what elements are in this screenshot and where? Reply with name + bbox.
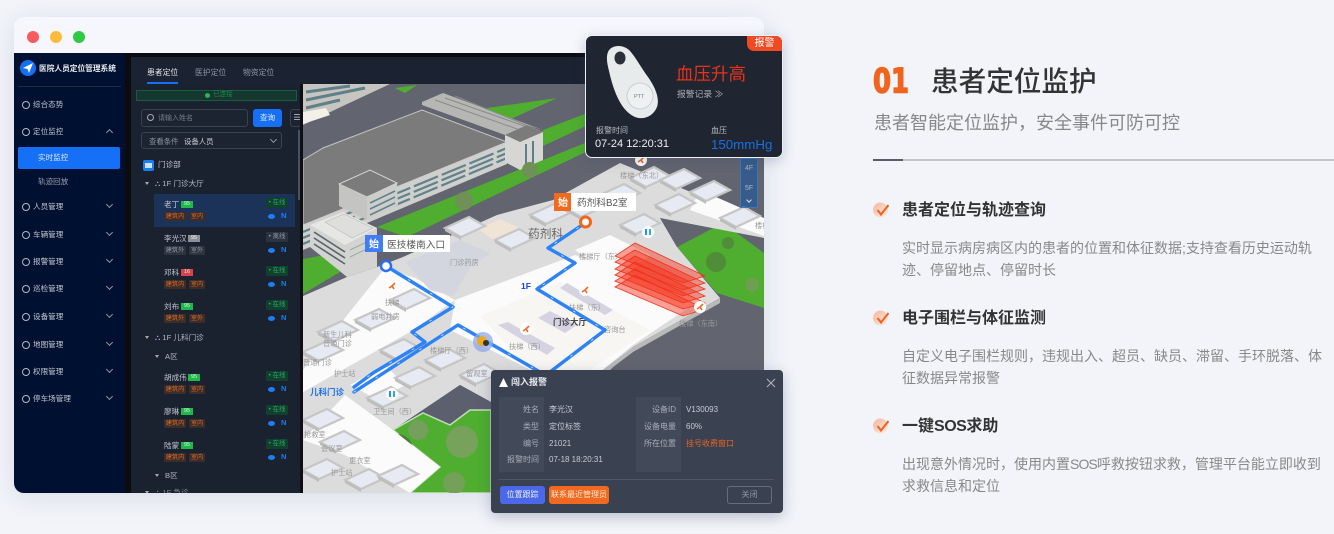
search button: 查询 [260,113,275,122]
menu item: 地图管理 [33,340,63,349]
map labels: 扶梯（西） [509,342,545,351]
menu item: 人员管理 [33,202,63,211]
blood pressure label: 血压 [711,126,727,135]
menu item [22,394,113,403]
map labels: 新生儿科 [323,330,352,339]
patient row: • 在线 [269,372,285,379]
start marker: south entrance [365,235,450,271]
button: track [500,486,545,504]
alert heading: 血压升高 [676,64,746,84]
label: outpatient hall: 门诊大厅 [553,317,588,327]
patient row: 建筑外 [166,315,184,322]
number label: 编号 [523,439,539,448]
icon: check [873,202,889,218]
submenu item: 轨迹回放 [38,177,68,186]
menu item [22,367,113,376]
patient row: 95 [191,235,197,241]
restroom pins [386,226,654,400]
white corridors and hall [303,190,764,493]
map labels: 留观室 [466,369,488,378]
feature heading: 电子围栏与体征监测 [902,310,1046,327]
start marker: pharmacy room: 药剂科B2室 [577,196,628,209]
map labels: 楼梯厅（东） [579,252,622,261]
left label column [499,397,544,472]
patient row: N [281,279,286,288]
patient row: 刘布 [164,302,179,311]
patient row: • 在线 [269,406,285,413]
patient row: 室内 [191,454,203,461]
tree node: ⛬ 1F 门诊大厅 [155,179,204,188]
icon: logo [20,60,36,76]
feature heading: 患者定位与轨迹查询 [902,202,1046,219]
lower lawn [393,410,491,493]
window card [14,17,764,493]
button: close: 关闭 [742,490,758,499]
battery value: 60% [686,422,702,431]
patient row: N [281,211,286,220]
patient row: 95 [184,442,190,448]
floor selector: 5F [745,185,753,192]
alert tag: 报警 [754,38,774,49]
green lawns [303,85,764,308]
section title: 患者定位监护 [931,66,1097,97]
tree node: B区 [165,471,178,480]
title bar dots [27,31,85,43]
map [303,84,764,493]
person marker [473,332,493,352]
search box [141,109,248,127]
patient row: 室外 [191,247,203,254]
time label: 报警时间 [507,455,539,464]
patient row: 室内 [191,386,203,393]
tabs bar [131,57,764,84]
patient row: 老丁 [164,200,179,209]
search box: 请输入姓名 [158,115,193,122]
feature text: 求救信息和定位 [902,478,1000,494]
label: 1F: 1F [521,281,531,291]
close icon [766,378,776,388]
map labels: 护士站 [331,468,353,477]
patient row: 建筑外 [166,247,184,254]
menu item: 综合态势 [33,100,63,109]
patient row: 陆蒙 [164,441,179,450]
patient row: 李光汉 [164,234,187,243]
menu item [22,230,113,239]
patient row [164,232,288,255]
patient row: 95 [191,374,197,380]
feature text [902,456,1321,494]
floor selector [740,158,758,208]
label: pediatric clinic: 儿科门诊 [310,387,345,397]
right road [660,218,700,247]
active menu item [18,147,120,169]
feature text: 实时显示病房病区内的患者的位置和体征数据;支持查看历史运动轨 [902,240,1312,256]
map labels: 扶梯（东） [569,303,605,312]
route line [354,223,605,392]
menu item [22,284,113,293]
patient row: 建筑内 [166,281,184,288]
patient row: N [281,384,286,393]
condition select: 设备人员 [184,137,214,146]
tab: 医护定位 [195,68,226,77]
blood pressure value: 150mmHg [711,137,772,152]
patient row: 廖琳 [164,407,179,416]
patient row: • 在线 [269,440,285,447]
top-left building [303,84,390,125]
connection status: 已连接 [213,91,233,98]
patient row: N [281,313,286,322]
active tab: 患者定位 [147,68,178,77]
menu item [22,127,113,136]
icon: teardrop tag device [606,46,658,118]
patient row: 95 [184,303,190,309]
selected row highlight [154,194,295,227]
patient row: 室内 [191,420,203,427]
menu item [22,257,113,266]
patient row: 邓科 [164,268,179,277]
menu item [22,340,113,349]
label: pharmacy: 药剂科 [528,227,563,241]
name value: 李光汉 [549,405,573,414]
patient row [164,405,288,428]
patient row: 16 [184,269,190,275]
patient row: • 在线 [269,267,285,274]
patient row [164,198,288,221]
escalators [498,283,613,355]
alert tag [747,36,782,51]
patient row: 建筑内 [166,420,184,427]
icon: warning [499,378,508,387]
feature text: 征数据异常报警 [902,370,1000,386]
feature text: 自定义电子围栏规则，违规出入、超员、缺员、滞留、手环脱落、体 [902,348,1322,364]
map labels: 楼梯厅（西） [430,346,473,355]
dialog title: 闯入报警 [511,377,547,387]
feature text [902,240,1312,278]
patient row: 胡成伟 [164,373,187,382]
menu item: 车辆管理 [33,230,63,239]
feature heading: 一键SOS求助 [902,418,998,435]
map labels: 会议室 [321,444,343,453]
red geofence stack [615,243,705,316]
left white building [310,212,377,277]
button: contact admin: 联系最近管理员 [551,490,607,499]
escalator pins [386,154,706,335]
patient row: 95 [184,408,190,414]
device id label: 设备ID [652,405,676,414]
map labels: 咨询台 [604,325,626,334]
patient row: 建筑内 [166,213,184,220]
hall floor [480,282,650,370]
icon: check [873,310,889,326]
start marker: south entrance: 始 [369,238,379,250]
tab: 物资定位 [243,68,274,77]
search button [253,109,282,127]
icon: check [873,418,889,434]
ground asphalt [303,84,764,493]
patient row: 室内 [191,281,203,288]
map labels: 楼梯（东北） [620,171,663,180]
start marker: pharmacy room: 始 [558,196,568,209]
start marker: south entrance: 医技楼南入口 [387,238,445,251]
location value: 挂号收费窗口 [686,439,734,448]
patient row: 95 [184,201,190,207]
intrusion alert dialog [491,370,783,513]
menu item: 设备管理 [33,312,63,321]
right label column [636,397,681,472]
device id value: V130093 [686,405,718,414]
button: contact admin [549,486,609,504]
button: close [727,486,772,504]
number value: 21021 [549,439,571,448]
rooms [303,167,760,492]
alert time value: 07-24 12:20:31 [595,138,669,150]
patient row: • 在线 [269,301,285,308]
condition select [141,132,282,149]
floor outer wall [600,298,720,377]
trees [381,162,759,494]
map labels: 卫生间（西） [373,407,416,416]
map labels [303,171,769,477]
blood pressure alert card [585,35,783,158]
icon: teardrop tag device: PTT [634,94,645,100]
system name: 医院人员定位管理系统 [39,64,116,73]
filter toggle [290,109,304,127]
map labels: 扶梯 [385,298,399,307]
menu item: 定位监控 [33,127,63,136]
tan pharmacy room [478,219,530,248]
pharmacy block [405,240,490,296]
patient row: 室外 [191,315,203,322]
patient row: N [281,245,286,254]
menu item: 巡检管理 [33,284,63,293]
grey asphalt patch [393,385,491,430]
patient row: • 离线 [269,233,285,240]
map labels: 门诊药房 [450,258,479,267]
floor plan base [303,163,764,493]
map labels: 更衣室 [349,456,371,465]
tree node: ⛬ 1F 儿科门诊 [155,333,204,342]
patient row: N [281,452,286,461]
map labels: 抢救室 [304,430,326,439]
map scroll edge [300,84,303,493]
feature text [902,348,1322,386]
condition select: 查看条件 [149,137,179,146]
map labels: 楼梯（东南） [679,319,722,328]
patient row [164,300,288,323]
tree node: A区 [165,352,178,361]
patient row: N [281,418,286,427]
divider [873,159,1334,161]
menu item: 停车场管理 [33,394,71,403]
patient row [164,371,288,394]
location label: 所在位置 [644,439,676,448]
type value: 定位标签 [549,422,581,431]
floor selector: 4F [745,165,753,172]
map labels: 普通门诊 [323,339,353,348]
connection status [136,90,297,101]
sidebar [14,53,125,493]
time value: 07-18 18:20:31 [549,455,603,464]
alert time label: 报警时间 [596,126,628,135]
type label: 类型 [523,422,539,431]
department name: 门诊部 [158,160,181,169]
main building roof [303,93,543,250]
alert record link: 报警记录 ≫ [677,89,723,99]
button: track: 位置跟踪 [506,490,538,499]
icon: folder [143,160,154,171]
menu item: 报警管理 [33,257,63,266]
map labels: 普通门诊 [303,358,333,367]
active tab [147,57,178,84]
patient row [164,439,288,462]
menu item: 权限管理 [33,367,63,376]
menu item [22,312,113,321]
map labels: 护士站 [334,369,356,378]
active menu item: 实时监控 [38,153,68,162]
name label: 姓名 [523,405,539,414]
start marker: pharmacy room [554,193,636,227]
feature text: 迹、停留地点、停留时长 [902,262,1056,278]
section subtitle: 患者智能定位监护，安全事件可防可控 [874,113,1180,133]
patient row: • 在线 [269,199,285,206]
patient row: 室内 [191,213,203,220]
feature text: 出现意外情况时，使用内置SOS呼救按钮求救，管理平台能立即收到 [902,456,1321,472]
map labels: 弱电井房 [371,312,400,321]
scrollbar [298,130,300,200]
patient row: 建筑内 [166,386,184,393]
patient row: 建筑内 [166,454,184,461]
battery label: 设备电量 [644,422,676,431]
patient row [164,266,288,289]
menu item [22,202,113,211]
list panel [131,84,300,493]
